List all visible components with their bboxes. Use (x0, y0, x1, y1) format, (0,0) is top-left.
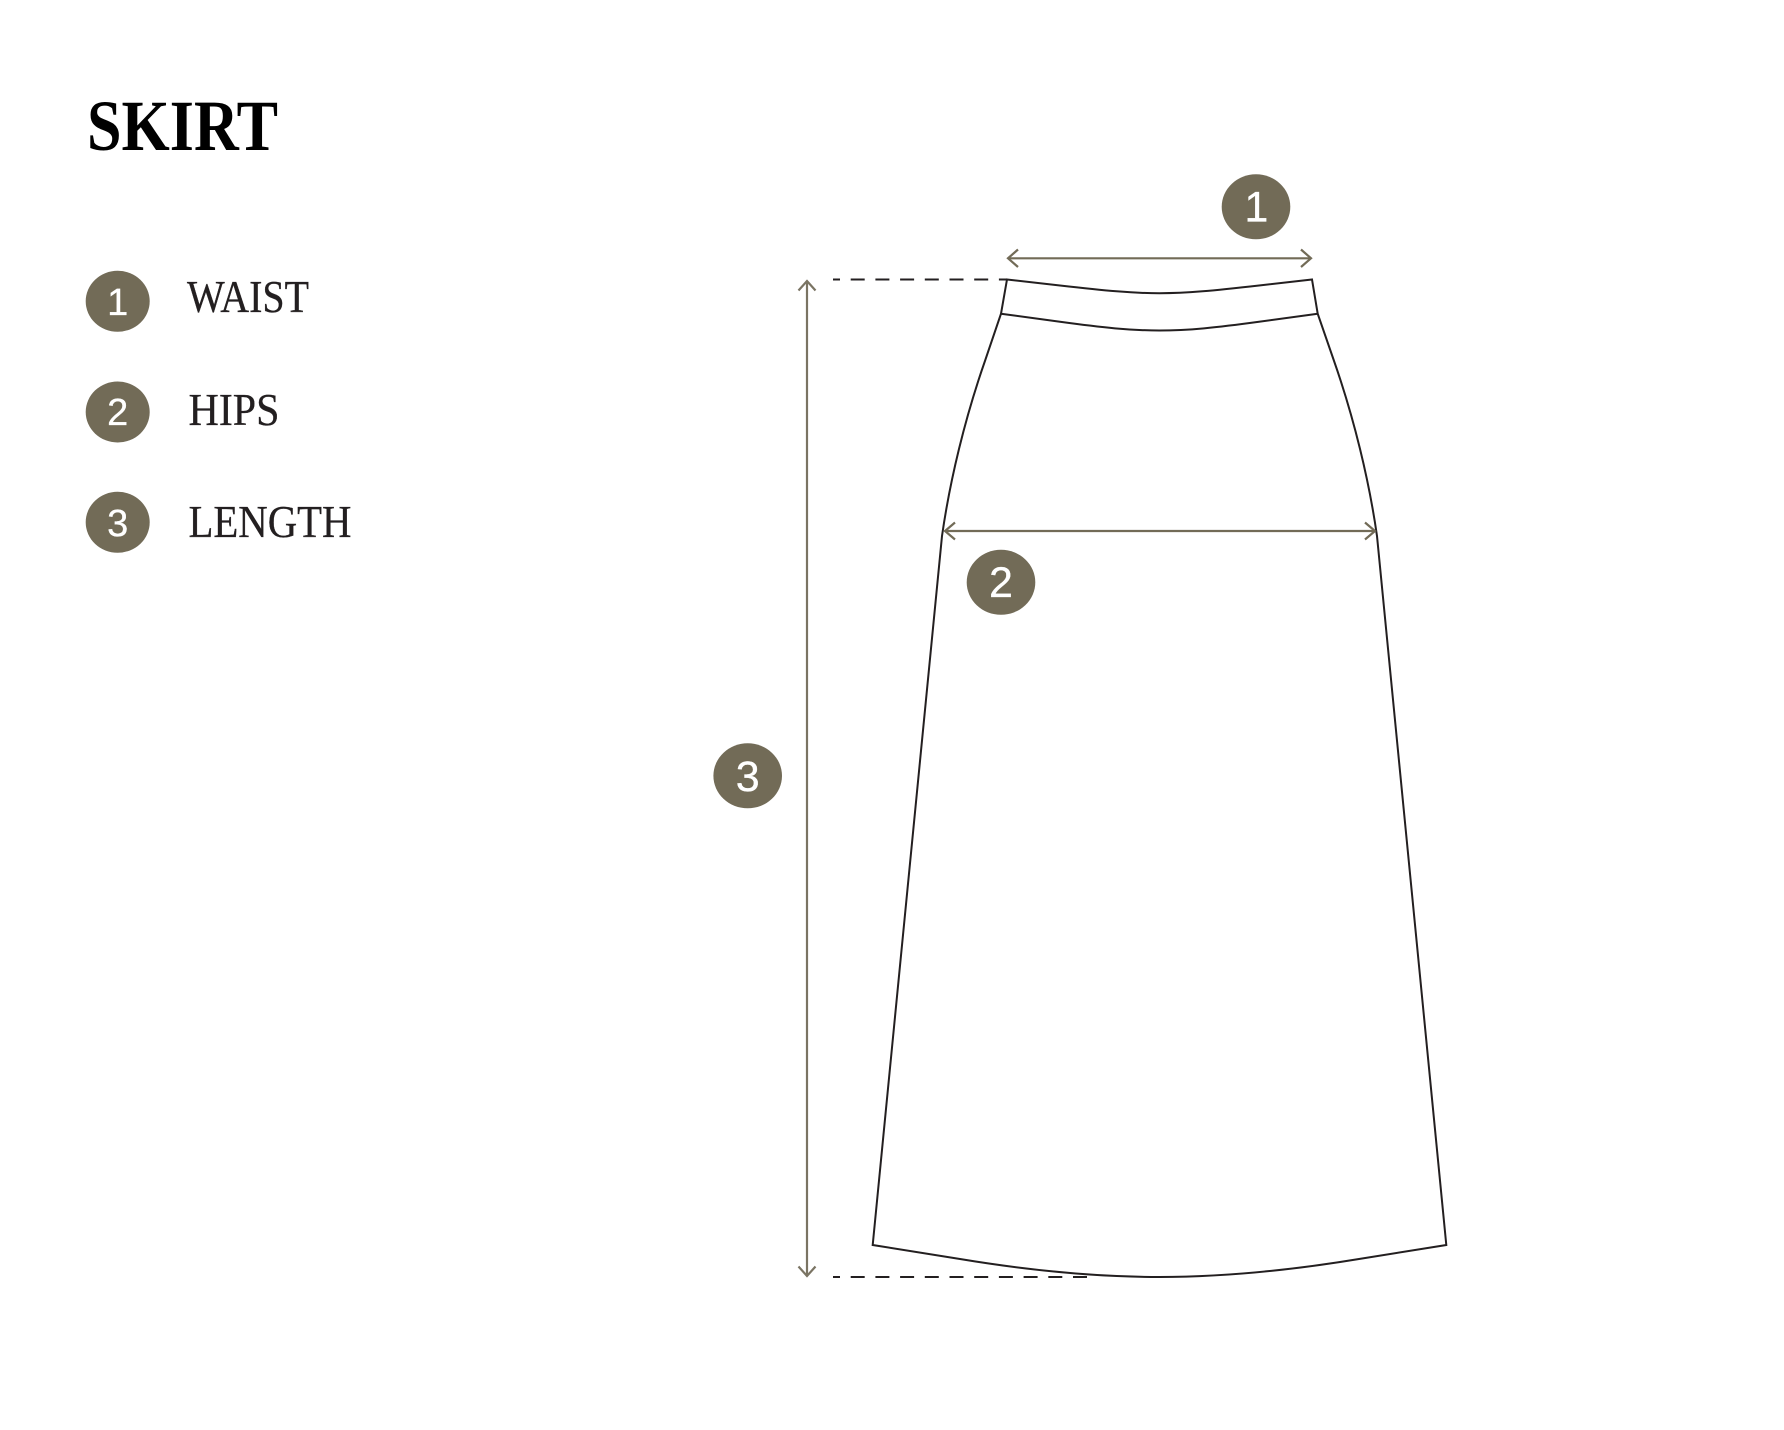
skirt diagram (713, 174, 1446, 1277)
legend item: hips: HIPS (188, 384, 280, 435)
marker 1: 1 (1244, 184, 1268, 232)
legend item: length: 3 (107, 503, 128, 545)
legend item: waist: 1 (107, 282, 128, 324)
marker 1 (1222, 174, 1290, 239)
marker 2: 2 (989, 559, 1013, 607)
marker 3 (713, 743, 782, 808)
marker 3: 3 (736, 753, 760, 801)
legend item: length (86, 492, 351, 553)
arrow: length (798, 281, 816, 1276)
legend (86, 271, 351, 553)
title: SKIRT (87, 86, 278, 166)
arrow: waist (1008, 250, 1311, 267)
arrow: hips (945, 522, 1375, 540)
skirt outline (873, 280, 1446, 1277)
legend item: hips: 2 (107, 392, 128, 434)
marker 2 (967, 550, 1035, 615)
legend item: length: LENGTH (188, 496, 352, 547)
legend item: waist: WAIST (187, 271, 309, 322)
legend item: waist (86, 271, 309, 332)
legend item: hips (86, 382, 280, 442)
dashed guide lines (833, 280, 1091, 1277)
